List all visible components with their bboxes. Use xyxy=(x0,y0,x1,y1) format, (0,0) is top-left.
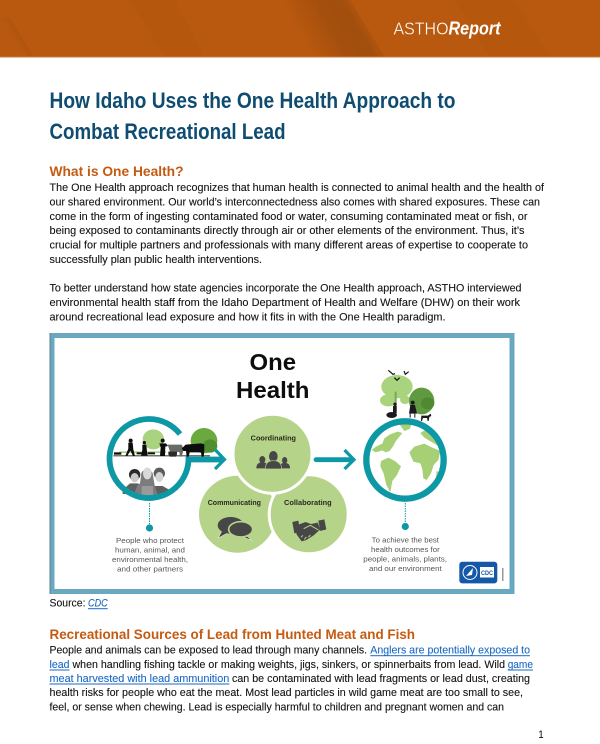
callout: people who protect: People who protect xyxy=(116,536,184,545)
venn: coordinating: Coordinating xyxy=(251,434,296,443)
text block: One Health definition: come in the form of ingesting contaminated food or water, consuming contaminated meat or fish, or xyxy=(50,211,528,223)
icon: globe with trees and animals xyxy=(366,370,444,499)
figure title: One Health: One xyxy=(250,349,296,375)
title: How Idaho Uses the One Health Approach to xyxy=(50,88,456,113)
callout: best health outcomes: health outcomes for xyxy=(371,545,440,554)
scene: three health workers xyxy=(123,483,143,494)
arrow: collaboration to outcomes xyxy=(316,450,354,469)
title xyxy=(50,88,456,144)
venn: collaborating: Collaborating xyxy=(284,498,332,507)
logo: CDC: CDC xyxy=(481,570,493,577)
text block: recreational lead sources: meat harvested with lead ammunition xyxy=(50,673,229,685)
venn: collaborating xyxy=(269,475,348,554)
venn: communicating: Communicating xyxy=(208,498,261,507)
title: Combat Recreational Lead xyxy=(50,119,286,144)
icon: group of people xyxy=(256,451,290,469)
panel: One Health figure xyxy=(50,333,512,594)
heading: What is One Health?: What is One Health? xyxy=(50,164,184,179)
text block: recreational lead sources: health risks for people who eat the meat. Most lead particles in wild game meat are too small to see, xyxy=(50,687,523,699)
icon: people circle with arrow xyxy=(110,419,224,498)
icon: handshake xyxy=(292,519,326,541)
text block: ASTHO interview intro: To better understand how state agencies incorporate the One Health approach, ASTHO interviewed xyxy=(50,283,522,295)
source caption: Source: xyxy=(50,598,86,610)
continents xyxy=(372,424,442,492)
text block: recreational lead sources: game xyxy=(508,659,533,671)
callout: people who protect: and other partners xyxy=(117,564,183,573)
text block: One Health definition: successfully plan public health interventions. xyxy=(50,254,262,266)
icon: speech bubbles xyxy=(218,517,253,540)
callout: people who protect: human, animal, and xyxy=(115,546,185,554)
text block: One Health definition xyxy=(50,182,545,266)
source caption: CDC xyxy=(88,598,108,610)
text block: recreational lead sources: feel, or sense when chewing. Lead is especially harmful to children and pregnant women and can xyxy=(50,702,504,714)
text block: ASTHO interview intro xyxy=(50,283,522,323)
figure title: One Health xyxy=(236,349,310,403)
page number: 1 xyxy=(538,729,544,741)
source caption xyxy=(50,598,108,610)
text block: recreational lead sources: when handling fishing tackle or making weights, jigs, sinkers, or spinnerbaits from lead. Wild xyxy=(72,659,505,671)
venn: coordinating xyxy=(233,414,312,493)
logo: ASTHO Report xyxy=(394,18,501,38)
scene: trees and animals xyxy=(113,428,217,496)
callout: best health outcomes: To achieve the best xyxy=(372,536,439,545)
text block: recreational lead sources xyxy=(50,645,533,714)
text block: recreational lead sources: lead xyxy=(50,659,70,671)
venn: communicating xyxy=(199,476,276,553)
logo: ASTHO Report: Report xyxy=(448,18,501,38)
text block: recreational lead sources: Anglers are potentially exposed to xyxy=(370,645,530,657)
text block: recreational lead sources: can be contaminated with lead fragments or lead dust, creating xyxy=(232,673,530,685)
text block: One Health definition: crucial for multiple partners and professionals with many different areas of expertise to cooperate to xyxy=(50,240,528,252)
callout: best health outcomes: people, animals, plants, xyxy=(363,554,447,564)
text block: One Health definition: being exposed to contaminants directly through air or other elements of the environment. Thus, it’s xyxy=(50,225,525,237)
logo: CDC xyxy=(459,562,504,583)
callout: people who protect xyxy=(112,503,188,573)
callout: best health outcomes: and our environment xyxy=(369,564,442,573)
text block: One Health definition: The One Health approach recognizes that human health is connected to animal health and the health of xyxy=(50,182,545,194)
heading: Recreational Sources of Lead: Recreational Sources of Lead from Hunted Meat and Fish xyxy=(50,627,415,642)
text block: recreational lead sources: People and animals can be exposed to lead through many channels. xyxy=(50,645,367,657)
text block: ASTHO interview intro: around recreational lead exposure and how it fits in with the One Health paradigm. xyxy=(50,311,446,323)
birds xyxy=(388,370,409,380)
header banner xyxy=(0,0,600,58)
trees xyxy=(380,375,413,406)
callout: people who protect: environmental health, xyxy=(112,555,188,564)
logo: ASTHO Report: ASTHO xyxy=(394,18,448,38)
text block: One Health definition: our shared environment. Our world’s interconnectedness also comes with shared exposures. These can xyxy=(50,196,540,208)
text block: ASTHO interview intro: environmental health staff from the Idaho Department of Health and Welfare (DHW) on their work xyxy=(50,297,520,309)
figure title: One Health: Health xyxy=(236,377,310,403)
people and animals xyxy=(386,401,431,421)
callout: best health outcomes xyxy=(363,503,447,573)
